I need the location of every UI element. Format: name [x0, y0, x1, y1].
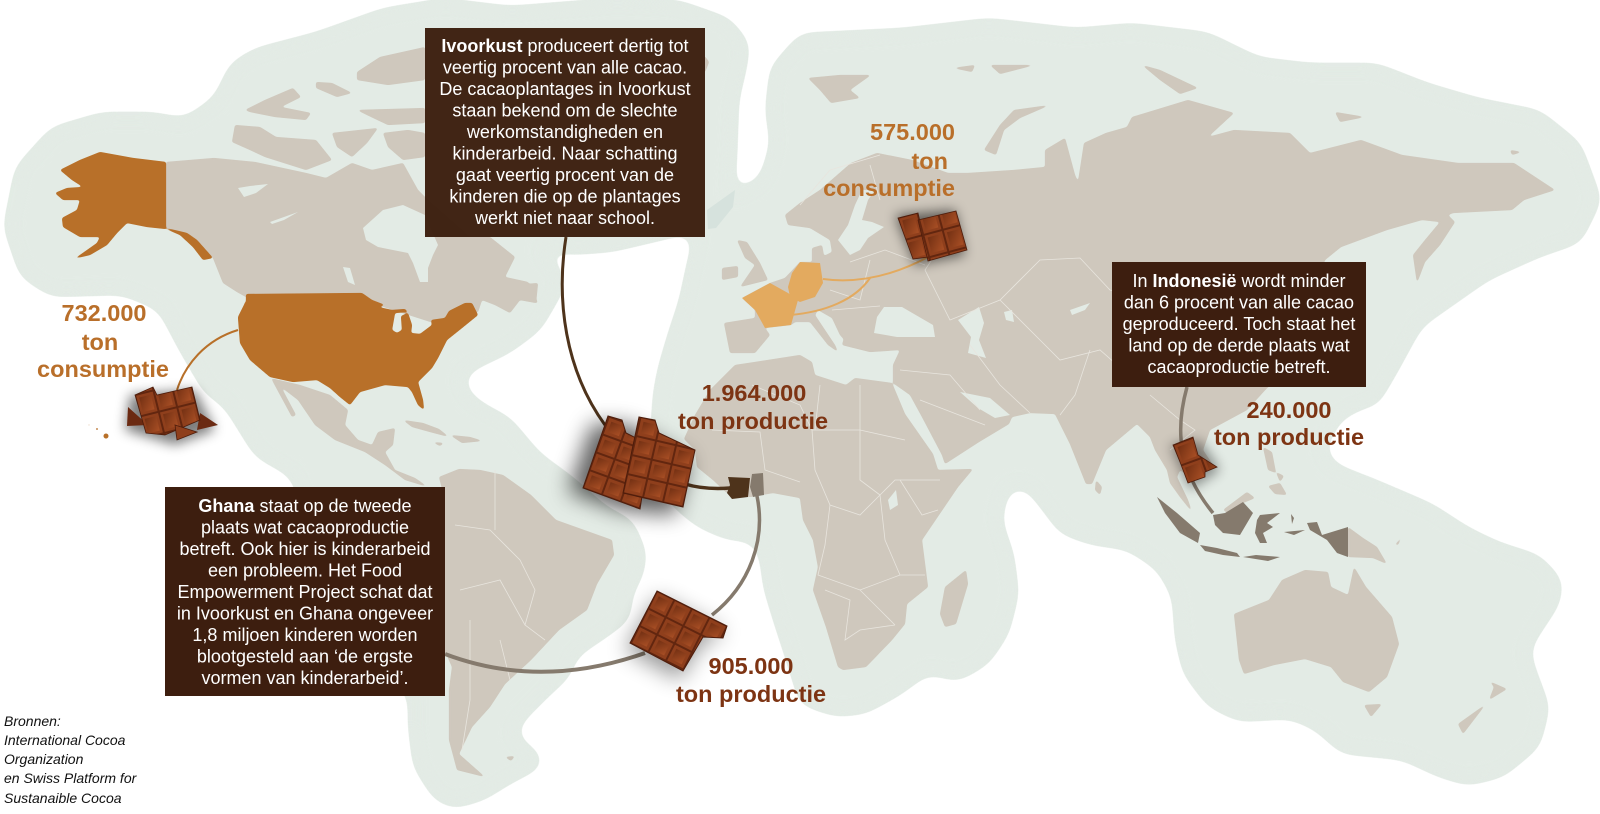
callout: Ghana: 1,8 miljoen kinderen worden	[192, 625, 418, 645]
label: Europe consumption: ton	[911, 148, 948, 174]
callout: Ivoorkust: Ivoorkust produceert dertig tot	[441, 36, 689, 56]
callout: Ghana: een probleem. Het Food	[208, 560, 402, 580]
land: Australia	[1234, 567, 1399, 692]
land: North America mainland	[166, 158, 538, 325]
land: Caribbean	[403, 420, 483, 446]
land: Baja California	[272, 380, 296, 417]
text block: sources: International Cocoa	[4, 732, 126, 748]
label: Europe consumption: consumptie	[823, 175, 955, 201]
connector: France to chocolate	[790, 278, 870, 315]
connector: USA to chocolate	[177, 330, 238, 390]
callout: Ivoorkust: veertig procent van alle cacao.	[443, 58, 687, 78]
map: inland seas and lakes	[238, 184, 1090, 510]
callout: Indonesië: dan 6 procent van alle cacao	[1124, 292, 1354, 312]
text block: sources: Sustanaible Cocoa	[4, 790, 122, 806]
label: Europe consumption: 575.000	[870, 119, 955, 145]
callout: Ivoorkust	[425, 28, 705, 237]
map: USA and Alaska highlighted orange	[55, 152, 478, 439]
callout: Ivoorkust: De cacaoplantages in Ivoorkust	[439, 79, 691, 99]
map: Ghana	[750, 473, 764, 497]
land: Malaysian Borneo	[1223, 492, 1255, 513]
map: country borders	[455, 155, 1250, 750]
label: USA consumption: consumptie	[37, 356, 169, 382]
label: Ivory Coast production: ton productie	[678, 408, 828, 434]
land: Newfoundland	[515, 283, 538, 303]
callout: Ivoorkust: werkomstandigheden en	[466, 122, 663, 142]
label: Indonesia production: 240.000	[1247, 397, 1331, 423]
callout: Ghana	[165, 487, 445, 696]
connector: Germany to chocolate	[823, 256, 930, 280]
callout: Indonesië: land op de derde plaats wat	[1128, 336, 1350, 356]
land: Alaska	[55, 152, 213, 263]
land: Tasmania	[1364, 704, 1382, 717]
land: Arctic Eurasian islands	[808, 65, 1522, 155]
callout: Ghana: vormen van kinderarbeid’.	[201, 668, 409, 688]
land: Hawaii	[88, 424, 109, 439]
land: Eurasia	[724, 100, 1555, 512]
callout: Indonesië	[1112, 262, 1366, 387]
callout: Indonesië: In Indonesië wordt minder	[1132, 271, 1346, 291]
connector: Ghana to chocolate	[712, 496, 759, 615]
callout: Ivoorkust: kinderen die op de plantages	[449, 186, 681, 206]
land: New Zealand	[1458, 674, 1507, 734]
label: Indonesia production	[1214, 397, 1364, 450]
callout: Indonesië: geproduceerd. Toch staat het	[1123, 314, 1355, 334]
land: Falklands	[505, 756, 515, 761]
label: USA consumption: ton	[82, 329, 118, 355]
callout: Ghana: blootgesteld aan ‘de ergste	[197, 646, 413, 666]
text block: sources: Organization	[4, 751, 84, 767]
label: USA consumption: 732.000	[62, 300, 146, 326]
land: Sri Lanka	[1095, 480, 1102, 495]
label: Ivory Coast production	[678, 380, 828, 434]
land: Arctic islands	[232, 47, 425, 170]
callout: Ghana: Ghana staat op de tweede	[198, 496, 412, 516]
land: Mexico and Central America	[270, 378, 428, 487]
land: Pacific islands	[1395, 535, 1403, 545]
label: Europe consumption	[823, 119, 955, 201]
text block: sources: en Swiss Platform for	[4, 770, 138, 786]
callout: Ivoorkust: kinderarbeid. Naar schatting	[452, 144, 678, 164]
chocolate: Ivory Coast bars	[568, 416, 695, 515]
connector: chocolate to Ivory Coast	[685, 484, 730, 488]
label: Ghana production: 905.000	[709, 653, 793, 679]
label: Ghana production	[676, 653, 826, 707]
callout: Indonesië: cacaoproductie betreft.	[1147, 357, 1331, 377]
chocolate: USA pieces	[125, 387, 218, 445]
text block: sources	[4, 713, 138, 806]
chocolate: Europe pieces	[895, 210, 967, 265]
callout: Ghana: plaats wat cacaoproductie	[201, 518, 409, 538]
land: British Isles	[722, 240, 768, 287]
map: Ivory Coast	[727, 477, 750, 499]
map: overlap of the two halos	[707, 190, 735, 229]
connector: chocolate to Ghana callout	[445, 653, 645, 672]
label: Ghana production: ton productie	[676, 681, 826, 707]
connector: Indonesia callout to Indonesia	[1181, 387, 1213, 513]
label: Ivory Coast production: 1.964.000	[702, 380, 806, 406]
label: USA consumption	[37, 300, 169, 382]
text block: sources: Bronnen:	[4, 713, 61, 729]
chocolate: Indonesia piece	[1170, 437, 1220, 490]
land: Madagascar	[940, 570, 968, 627]
land: Philippines	[1263, 447, 1287, 495]
callout: Ghana: in Ivoorkust en Ghana ongeveer	[177, 604, 433, 624]
callout: Ghana: Empowerment Project schat dat	[177, 582, 433, 602]
label: Indonesia production: ton productie	[1214, 424, 1364, 450]
callout: Ivoorkust: staan bekend om de slechte	[452, 100, 678, 120]
chocolate: Ghana bar	[625, 591, 727, 680]
map: Indonesia	[1157, 497, 1348, 561]
callout: Ivoorkust: gaat veertig procent van de	[456, 165, 674, 185]
map: France and Germany highlighted	[742, 262, 823, 328]
land: contiguous United States	[237, 293, 478, 410]
callout: Ivoorkust: werkt niet naar school.	[474, 208, 655, 228]
map: land masses	[166, 47, 1555, 777]
land: Papua New Guinea	[1348, 527, 1387, 564]
callout: Ghana: betreft. Ook hier is kinderarbeid	[179, 539, 431, 559]
land: South America	[420, 469, 614, 777]
connector: Ivory Coast callout to chocolate	[562, 237, 605, 425]
land: Africa	[684, 355, 973, 670]
land: Greenland	[704, 55, 709, 75]
